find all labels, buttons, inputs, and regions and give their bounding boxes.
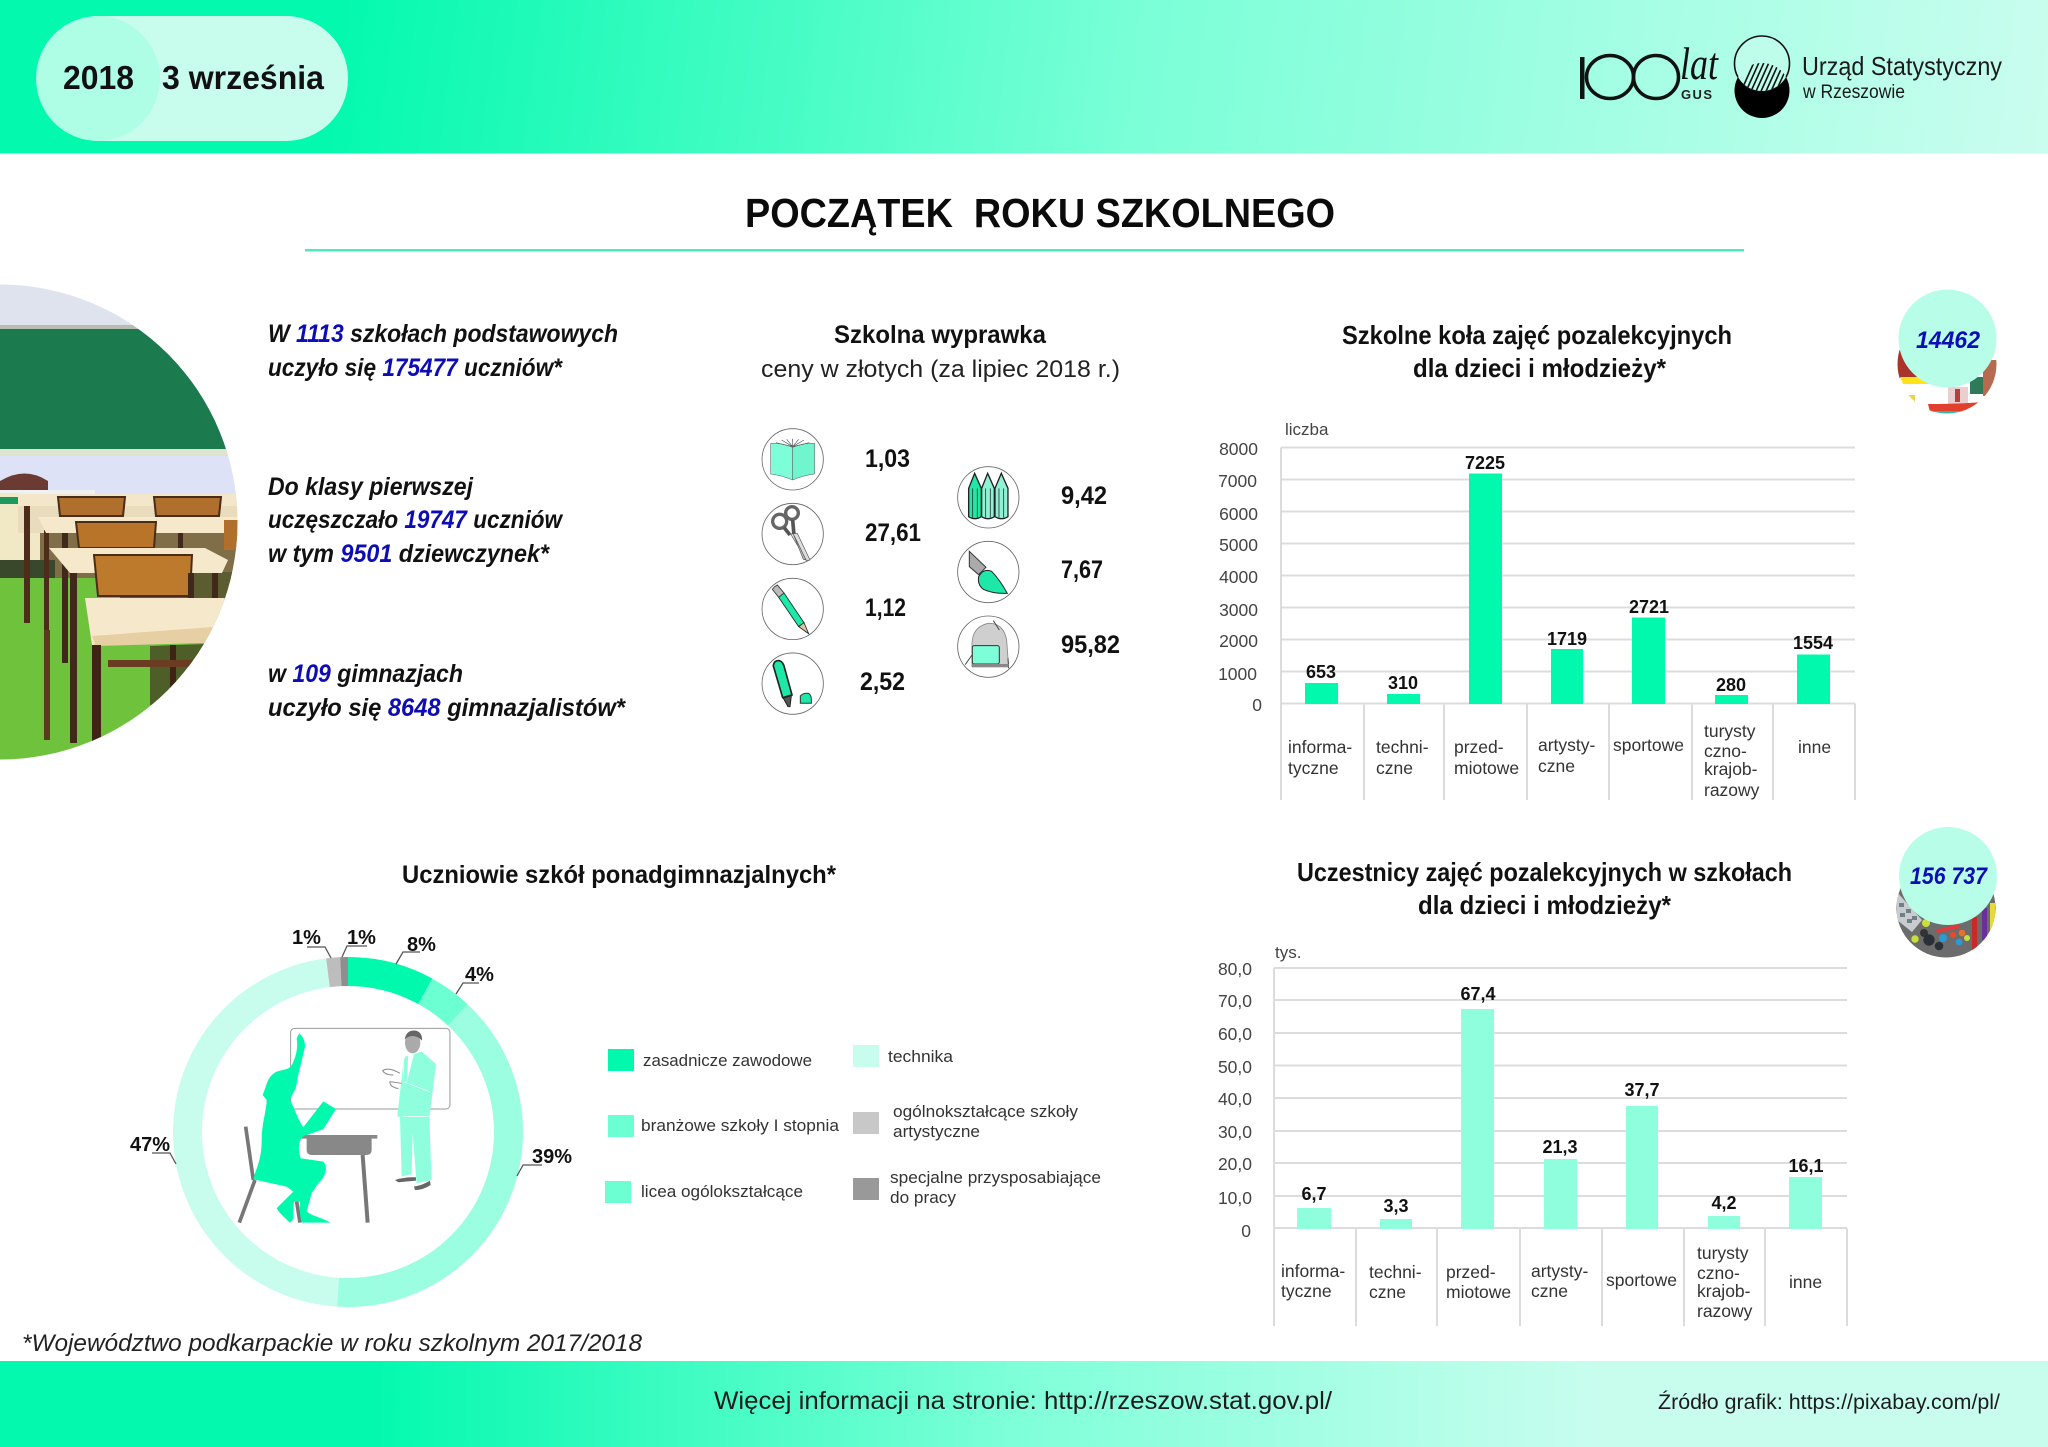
y axis labels: 50,0 (1218, 1057, 1252, 1077)
legend: industry schools: branżowe szkoły I stopnia (641, 1116, 840, 1135)
percent labels and leaders: 47% (130, 1134, 170, 1156)
category labels: sportowe (1613, 735, 1684, 755)
value labels (1301, 984, 1824, 1216)
category labels: czno- (1704, 741, 1747, 761)
category labels: miotowe (1446, 1282, 1511, 1302)
y axis labels: 5000 (1219, 535, 1258, 555)
legend: special schools: do pracy (890, 1188, 957, 1207)
category labels: przed- (1446, 1262, 1496, 1282)
prices (860, 445, 1120, 696)
heading: secondary school students: Uczniowie szkół ponadgimnazjalnych* (402, 861, 836, 889)
legend: art schools (853, 1102, 1079, 1141)
date pill: 2018 (63, 59, 134, 96)
icon: crayons (958, 467, 1019, 528)
category labels: czne (1531, 1281, 1568, 1301)
prices: 95,82 (1061, 631, 1120, 659)
date pill: 3 września (162, 59, 325, 96)
legend (605, 1045, 1101, 1207)
y axis labels: 0 (1252, 695, 1262, 715)
y axis labels: 0 (1241, 1221, 1251, 1241)
y axis labels: 7000 (1218, 471, 1257, 491)
value labels: 280 (1716, 675, 1746, 695)
category labels: krajob- (1697, 1281, 1751, 1301)
value labels: 7225 (1465, 453, 1505, 473)
header band (0, 0, 2048, 154)
category labels: inne (1798, 737, 1831, 757)
y axis labels: 80,0 (1218, 959, 1252, 979)
icon: scissors (762, 503, 823, 565)
footer link text: Więcej informacji na stronie: http://rzeszow.stat.gov.pl/ (714, 1387, 1332, 1415)
category labels: techni- (1369, 1262, 1422, 1282)
category labels: przed- (1454, 737, 1504, 757)
heading: participants (1297, 857, 1792, 920)
bar chart: school clubs (1218, 420, 1855, 800)
percent labels and leaders: 39% (532, 1146, 572, 1168)
grid and axes (1281, 448, 1855, 800)
value labels: 4,2 (1711, 1193, 1737, 1213)
bars (1297, 1009, 1822, 1229)
y axis labels: 4000 (1219, 567, 1258, 587)
category labels: czne (1369, 1282, 1406, 1302)
footer band (0, 1361, 2048, 1447)
category labels (1281, 1243, 1822, 1321)
legend: technical: technika (888, 1047, 954, 1066)
value labels: 3,3 (1383, 1196, 1409, 1216)
legend: general high schools: licea ogólokształcące (641, 1182, 803, 1201)
text block: first grade: Do klasy pierwszej (268, 473, 474, 501)
image source note: Źródło grafik: https://pixabay.com/pl/ (1658, 1391, 2000, 1414)
prices: 27,61 (865, 519, 921, 547)
logo: 100 lat GUS (1580, 38, 1719, 102)
illustration: classroom figures (239, 1028, 450, 1223)
footnote: *Województwo podkarpackie w roku szkolnym 2017/2018 (22, 1330, 643, 1357)
value labels: 67,4 (1460, 984, 1496, 1004)
value labels: 37,7 (1624, 1080, 1660, 1100)
y axis labels: 2000 (1219, 631, 1258, 651)
legend: special schools: specjalne przysposabiające (890, 1168, 1101, 1187)
category labels: tyczne (1281, 1281, 1332, 1301)
badge: total clubs 14462: 14462 (1916, 327, 1981, 354)
unit label: liczba (1285, 420, 1329, 439)
category labels: czne (1538, 756, 1575, 776)
bars (1305, 474, 1830, 704)
y axis labels: 8000 (1219, 439, 1258, 459)
y axis labels: 60,0 (1218, 1024, 1252, 1044)
prices: 2,52 (860, 668, 905, 696)
bar chart: participants (1218, 943, 1847, 1326)
logo: 100 lat GUS: lat (1680, 38, 1719, 89)
percent labels and leaders: 1% (292, 927, 321, 949)
heading: school clubs (1342, 320, 1732, 383)
icon: backpack (958, 616, 1019, 677)
badge: total clubs 14462 (1897, 290, 1998, 418)
heading: school clubs: Szkolne koła zajęć pozalekcyjnych (1342, 320, 1732, 350)
category labels: turysty (1697, 1243, 1749, 1263)
category labels: miotowe (1454, 758, 1519, 778)
unit label: tys. (1275, 943, 1301, 962)
badge: total participants 156 737 (1896, 827, 1997, 958)
prices: 7,67 (1061, 556, 1103, 584)
category labels: informa- (1281, 1261, 1345, 1281)
text block: middle schools: uczyło się 8648 gimnazjalistów* (268, 694, 626, 722)
panel: school supply prices (762, 429, 1120, 714)
category labels: czno- (1697, 1263, 1740, 1283)
value labels: 16,1 (1788, 1156, 1824, 1176)
heading: participants: dla dzieci i młodzieży* (1418, 890, 1672, 920)
text block: middle schools: w 109 gimnazjach (268, 660, 463, 688)
heading: school supplies (761, 321, 1120, 383)
legend: art schools: artystyczne (893, 1122, 980, 1141)
logo text (1802, 51, 2002, 103)
y axis labels (1218, 959, 1252, 1241)
text block: middle schools (268, 660, 626, 722)
text block: primary schools: uczyło się 175477 uczniów* (268, 354, 563, 382)
prices: 1,03 (865, 445, 910, 473)
y axis labels: 3000 (1219, 600, 1258, 620)
percent labels and leaders: 8% (407, 934, 436, 956)
date pill (36, 16, 348, 141)
legend: art schools: ogólnokształcące szkoły (893, 1102, 1079, 1121)
icon: pencil (762, 578, 823, 640)
logo text: Urząd Statystyczny (1802, 51, 2002, 81)
percent labels and leaders (130, 927, 572, 1176)
text block: primary schools (268, 320, 618, 382)
value labels: 1554 (1793, 633, 1833, 653)
y axis labels (1218, 439, 1262, 715)
badge: total participants 156 737: 156 737 (1910, 863, 1988, 890)
icon: paintbrush (958, 541, 1019, 603)
category labels (1288, 721, 1831, 800)
category labels: techni- (1376, 737, 1429, 757)
logo text: w Rzeszowie (1802, 82, 1905, 103)
y axis labels: 6000 (1219, 504, 1258, 524)
category labels: artysty- (1531, 1261, 1589, 1281)
donut chart: secondary school students (130, 927, 572, 1292)
value labels: 6,7 (1301, 1184, 1327, 1204)
percent labels and leaders: 4% (465, 964, 494, 986)
heading: participants: Uczestnicy zajęć pozalekcyjnych w szkołach (1297, 857, 1792, 887)
legend: technical (853, 1045, 954, 1067)
y axis labels: 10,0 (1218, 1188, 1252, 1208)
heading: school supplies: Szkolna wyprawka (834, 321, 1047, 349)
logo: statistical office emblem (1730, 36, 1794, 118)
icon: notebook (762, 429, 823, 490)
heading: school supplies: ceny w złotych (za lipiec 2018 r.) (761, 356, 1120, 383)
text block: first grade: uczęszczało 19747 uczniów (268, 506, 563, 534)
value labels: 653 (1306, 662, 1336, 682)
grid and axes (1274, 968, 1847, 1326)
category labels: czne (1376, 758, 1413, 778)
y axis labels: 1000 (1218, 664, 1257, 684)
category labels: razowy (1704, 780, 1760, 800)
category labels: artysty- (1538, 735, 1596, 755)
value labels: 2721 (1629, 597, 1669, 617)
legend: special schools (853, 1168, 1101, 1207)
legend: vocational: zasadnicze zawodowe (643, 1051, 812, 1070)
text block: primary schools: W 1113 szkołach podstawowych (268, 320, 618, 348)
text block: first grade: w tym 9501 dziewczynek* (268, 540, 550, 568)
category labels: turysty (1704, 721, 1756, 741)
prices: 9,42 (1061, 482, 1107, 510)
category labels: informa- (1288, 737, 1352, 757)
prices: 1,12 (865, 594, 906, 622)
percent labels and leaders: 1% (347, 927, 376, 949)
value labels: 310 (1388, 673, 1418, 693)
value labels (1306, 453, 1833, 695)
icon: marker (762, 653, 823, 714)
category labels: tyczne (1288, 758, 1339, 778)
y axis labels: 20,0 (1218, 1154, 1252, 1174)
y axis labels: 40,0 (1218, 1089, 1252, 1109)
value labels: 21,3 (1542, 1137, 1578, 1157)
y axis labels: 30,0 (1218, 1122, 1252, 1142)
logo: 100 lat GUS: GUS (1681, 87, 1712, 102)
heading: school clubs: dla dzieci i młodzieży* (1413, 353, 1667, 383)
title: POCZĄTEK ROKU SZKOLNEGO (745, 190, 1335, 236)
y axis labels: 70,0 (1218, 991, 1252, 1011)
category labels: krajob- (1704, 759, 1758, 779)
value labels: 1719 (1547, 629, 1587, 649)
category labels: inne (1789, 1272, 1822, 1292)
text block: first grade (268, 473, 563, 568)
category labels: razowy (1697, 1301, 1753, 1321)
category labels: sportowe (1606, 1270, 1677, 1290)
photo: classroom (0, 284, 240, 768)
